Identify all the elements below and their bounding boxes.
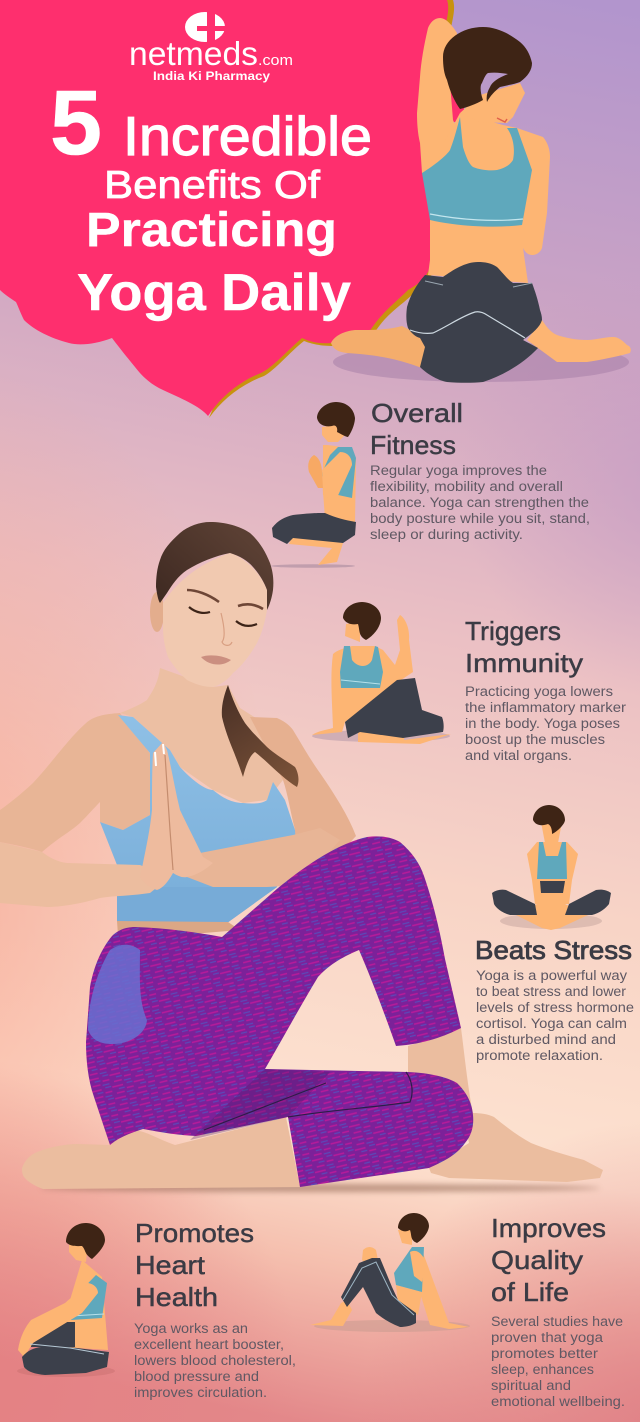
panel: improves quality of life [310,1213,625,1409]
title: 5 [50,72,102,174]
figure: seated side pose [17,1223,115,1377]
top yoga figure seated with arm raised [331,18,631,383]
teal top [422,117,532,227]
panel: improves quality of life: promotes better [491,1346,599,1361]
panel: triggers immunity [312,602,627,763]
panel: triggers immunity: Practicing yoga lowers [465,684,613,699]
dark pants [406,262,542,383]
figure: butterfly pose [492,805,611,930]
panel: improves quality of life: emotional wellbeing. [491,1394,625,1409]
panel: triggers immunity: boost up the muscles [465,732,605,747]
panel: beats stress: cortisol. Yoga can calm [476,1016,627,1031]
title [50,72,372,322]
waist [117,921,240,935]
logo: netmeds [129,10,293,83]
panel: improves quality of life: Improves [491,1213,606,1243]
right shin and foot [408,1028,603,1182]
title: Practicing [86,204,337,257]
panel: beats stress: Beats Stress [475,935,632,965]
figure: seated leaning back pose [310,1213,470,1332]
purple leggings [86,836,473,1187]
panel: improves quality of life: of Life [491,1277,569,1307]
logo: netmeds: India Ki Pharmacy [153,71,271,83]
sports top [100,715,296,923]
logo: netmeds: .com [258,52,293,69]
inner thigh shade [190,1069,330,1140]
near shoulder and forearm [187,717,356,887]
icon: netmeds cross [185,10,227,44]
face [460,83,525,123]
floor shadow [40,1184,600,1192]
main photo: woman in yoga twist [0,522,603,1192]
left foot and shin [22,1117,300,1189]
panel: triggers immunity: Triggers [465,616,561,646]
panel: promotes heart health: excellent heart booster, [134,1337,284,1352]
near forearm over top [187,828,340,887]
panel: promotes heart health: lowers blood cholesterol, [134,1353,296,1368]
ponytail [222,685,298,787]
hair [156,522,273,610]
panel: beats stress: promote relaxation. [476,1048,603,1063]
panel: overall fitness: sleep or during activity. [370,527,523,542]
panel: overall fitness: flexibility, mobility and overall [370,479,563,494]
panel: improves quality of life: sleep, enhances [491,1362,594,1377]
panel: promotes heart health: improves circulation. [134,1385,267,1400]
panel: promotes heart health: Promotes [135,1218,254,1248]
left shoulder and upper arm [0,713,155,852]
figure: squatting pose [271,402,356,568]
panel: beats stress: Yoga is a powerful way [476,968,627,983]
panel: triggers immunity: in the body. Yoga poses [465,716,620,731]
panel: improves quality of life: proven that yoga [491,1330,604,1345]
eyes brows and lips [187,590,263,609]
far forearm [0,842,170,907]
panel: overall fitness: balance. Yoga can strengthen the [370,495,589,510]
panel: overall fitness: Regular yoga improves the [370,463,547,478]
panel: beats stress: levels of stress hormone [476,1000,634,1015]
panel: triggers immunity: Immunity [465,648,583,678]
title: Yoga Daily [77,264,351,322]
panel: overall fitness: Fitness [370,430,456,460]
leggings seam [204,1072,412,1130]
panel: improves quality of life: Quality [491,1245,583,1275]
panel: promotes heart health: Health [135,1282,218,1312]
panel: beats stress: a disturbed mind and [476,1032,616,1047]
right leg and foot [527,320,631,362]
panel: beats stress: to beat stress and lower [476,984,627,999]
title: Incredible [123,105,372,167]
torso [428,113,550,283]
panel: beats stress [475,805,634,1063]
figure: seated twist pose [312,602,451,744]
face [163,553,267,687]
panel: promotes heart health [17,1218,296,1400]
panel: triggers immunity: the inflammatory marker [465,700,627,715]
raised arm [417,18,462,185]
panel: promotes heart health: Heart [135,1250,206,1280]
title: Benefits Of [104,164,320,207]
panel: triggers immunity: and vital organs. [465,748,572,763]
hair [443,27,532,109]
panel: overall fitness: body posture while you sit, stand, [370,511,590,526]
panel: overall fitness [271,398,590,568]
panel: promotes heart health: Yoga works as an [134,1321,248,1336]
hip knit patch [88,945,147,1044]
panel: overall fitness: Overall [371,398,463,428]
panel: promotes heart health: blood pressure and [134,1369,259,1384]
chest and neck [120,668,283,803]
panel: improves quality of life: Several studies have [491,1314,623,1329]
ear [150,592,164,632]
logo: netmeds: netmeds [129,35,258,72]
praying hands [140,742,213,890]
left leg and foot [331,326,430,368]
panel: improves quality of life: spiritual and [491,1378,571,1393]
pink banner with gold edge [0,0,464,418]
